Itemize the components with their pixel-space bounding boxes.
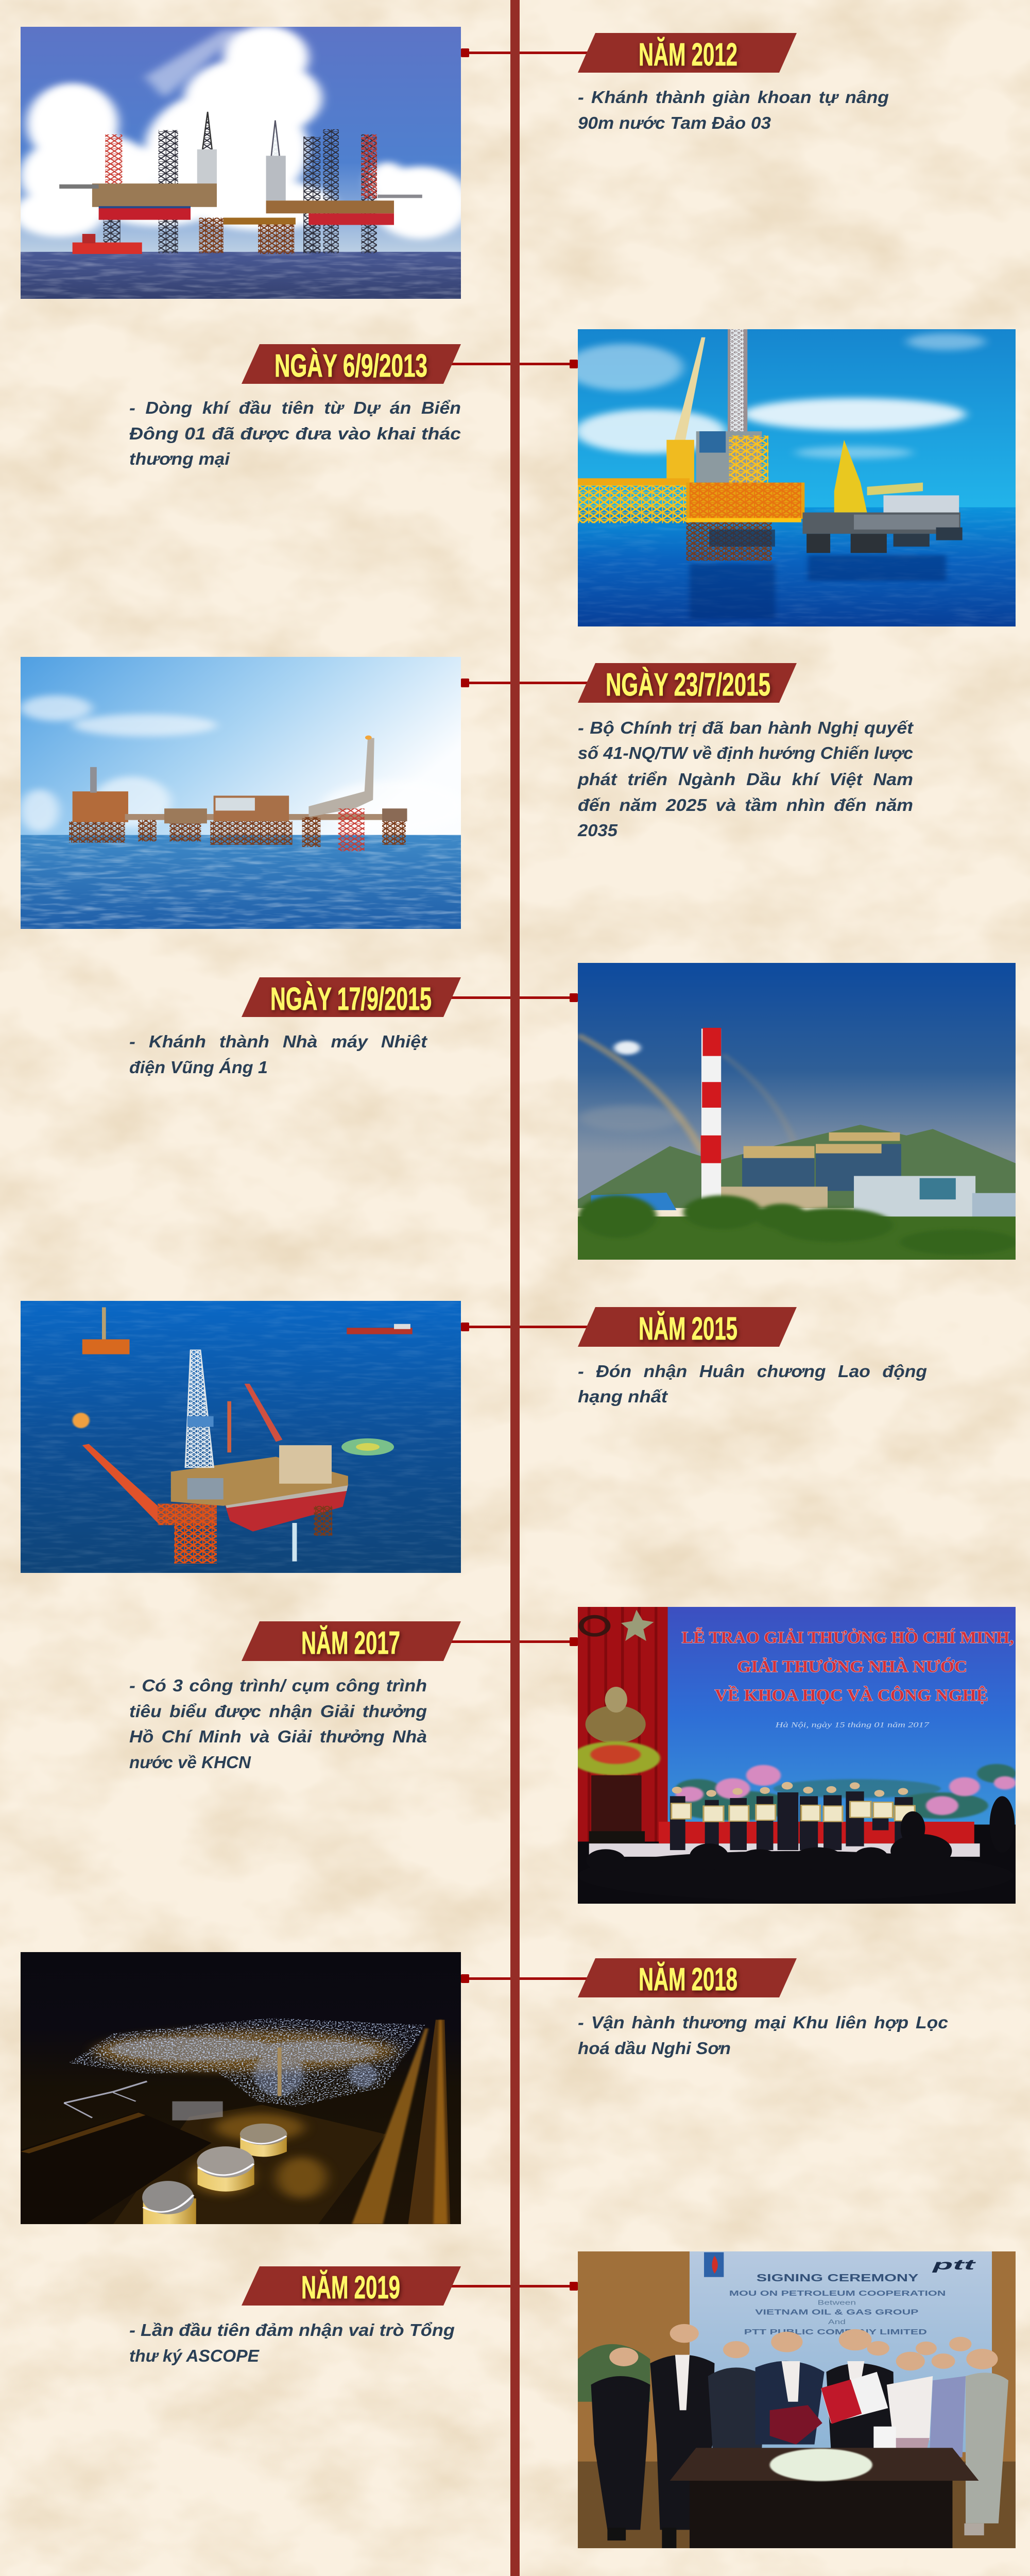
photo: platform complex in bright sky [21,657,461,929]
date banner [578,1307,797,1347]
description [129,2320,455,2365]
entry: 2012 [13,26,889,299]
central timeline [510,0,520,2576]
entry: 23/7/2015 [20,657,914,929]
date banner [242,2266,461,2306]
date banner [242,977,461,1017]
description: thư ký ASCOPE [129,2346,260,2365]
photo: power plant chimney and rainbow [578,963,1016,1260]
entry: 2019 [129,2251,1016,2548]
photo: signing ceremony: VIETNAM OIL & GAS GROUP [755,2308,919,2317]
description: phát triển Ngành Dầu khí Việt Nam [577,770,913,789]
description: - Đón nhận Huân chương Lao động [578,1362,927,1381]
entry: 17/9/2015 [129,963,1018,1260]
photo: jack-up rigs under clouds [21,27,461,299]
photo: signing ceremony: SIGNING CEREMONY [757,2273,918,2284]
photo: signing ceremony: Between [818,2299,856,2307]
date label: NGÀY 23/7/2015 [606,667,770,703]
description: hoá dầu Nghi Sơn [578,2039,731,2058]
date banner [242,344,461,384]
entry: 2015 [21,1301,927,1573]
photo: award ceremony stage [578,1607,1016,1904]
photo: refinery at night [21,1952,461,2224]
date label: NĂM 2019 [301,2270,400,2306]
description [578,1362,927,1406]
date label: NĂM 2017 [301,1625,400,1661]
date label: NĂM 2012 [639,37,737,73]
tanks [142,2124,287,2224]
date banner [578,1958,797,1997]
date label: NGÀY 17/9/2015 [270,981,432,1017]
photo: signing ceremony: MOU ON PETROLEUM COOPERATION [729,2289,946,2298]
description: - Khánh thành giàn khoan tự nâng [578,88,889,107]
description: Hồ Chí Minh và Giải thưởng Nhà [129,1727,427,1746]
description [129,398,461,468]
date banner [578,663,797,703]
entry: 2017 [129,1607,1016,1904]
description: nước về KHCN [129,1753,251,1772]
description: 2035 [577,821,618,840]
description: Đông 01 đã được đưa vào khai thác [129,424,461,443]
photo: offshore platform blue sea [578,329,1016,626]
date label: NĂM 2015 [639,1311,737,1347]
description: điện Vũng Áng 1 [129,1058,268,1077]
description: 90m nước Tam Đảo 03 [578,113,771,132]
description: tiêu biểu được nhận Giải thưởng [129,1702,427,1721]
photo: signing ceremony: And [828,2318,846,2326]
photo: aerial offshore platform [21,1301,461,1573]
entry: 2018 [21,1952,948,2224]
description: - Lần đầu tiên đảm nhận vai trò Tổng [129,2320,455,2340]
connector lines [451,52,590,2576]
description [578,88,889,132]
description: số 41-NQ/TW về định hướng Chiến lược [578,743,913,762]
photo: signing ceremony [578,2251,1016,2548]
description: - Vận hành thương mại Khu liên hợp Lọc [578,2013,948,2032]
description [577,718,914,840]
description [578,2013,948,2058]
photo: signing ceremony: PTT PUBLIC COMPANY LIMITED [744,2328,927,2336]
date banner [578,33,797,73]
description: - Bộ Chính trị đã ban hành Nghị quyết [578,718,914,737]
description [129,1032,428,1077]
description: đến năm 2025 và tầm nhìn đến năm [578,795,913,815]
photo: award ceremony stage: Hà Nội, ngày 15 tháng 01 năm 2017 [775,1721,930,1729]
description: hạng nhất [578,1387,668,1406]
photo: signing ceremony: ptt [932,2256,976,2273]
date label: NGÀY 6/9/2013 [274,348,427,384]
description [129,1676,427,1772]
description: - Có 3 công trình/ cụm công trình [129,1676,427,1695]
description: thương mại [129,449,230,468]
connector end squares [461,48,578,2576]
description: - Khánh thành Nhà máy Nhiệt [129,1032,428,1051]
date banner [242,1621,461,1661]
date label: NĂM 2018 [639,1962,737,1997]
description: - Dòng khí đầu tiên từ Dự án Biển [129,398,461,417]
entry: 6/9/2013 [129,329,1016,626]
